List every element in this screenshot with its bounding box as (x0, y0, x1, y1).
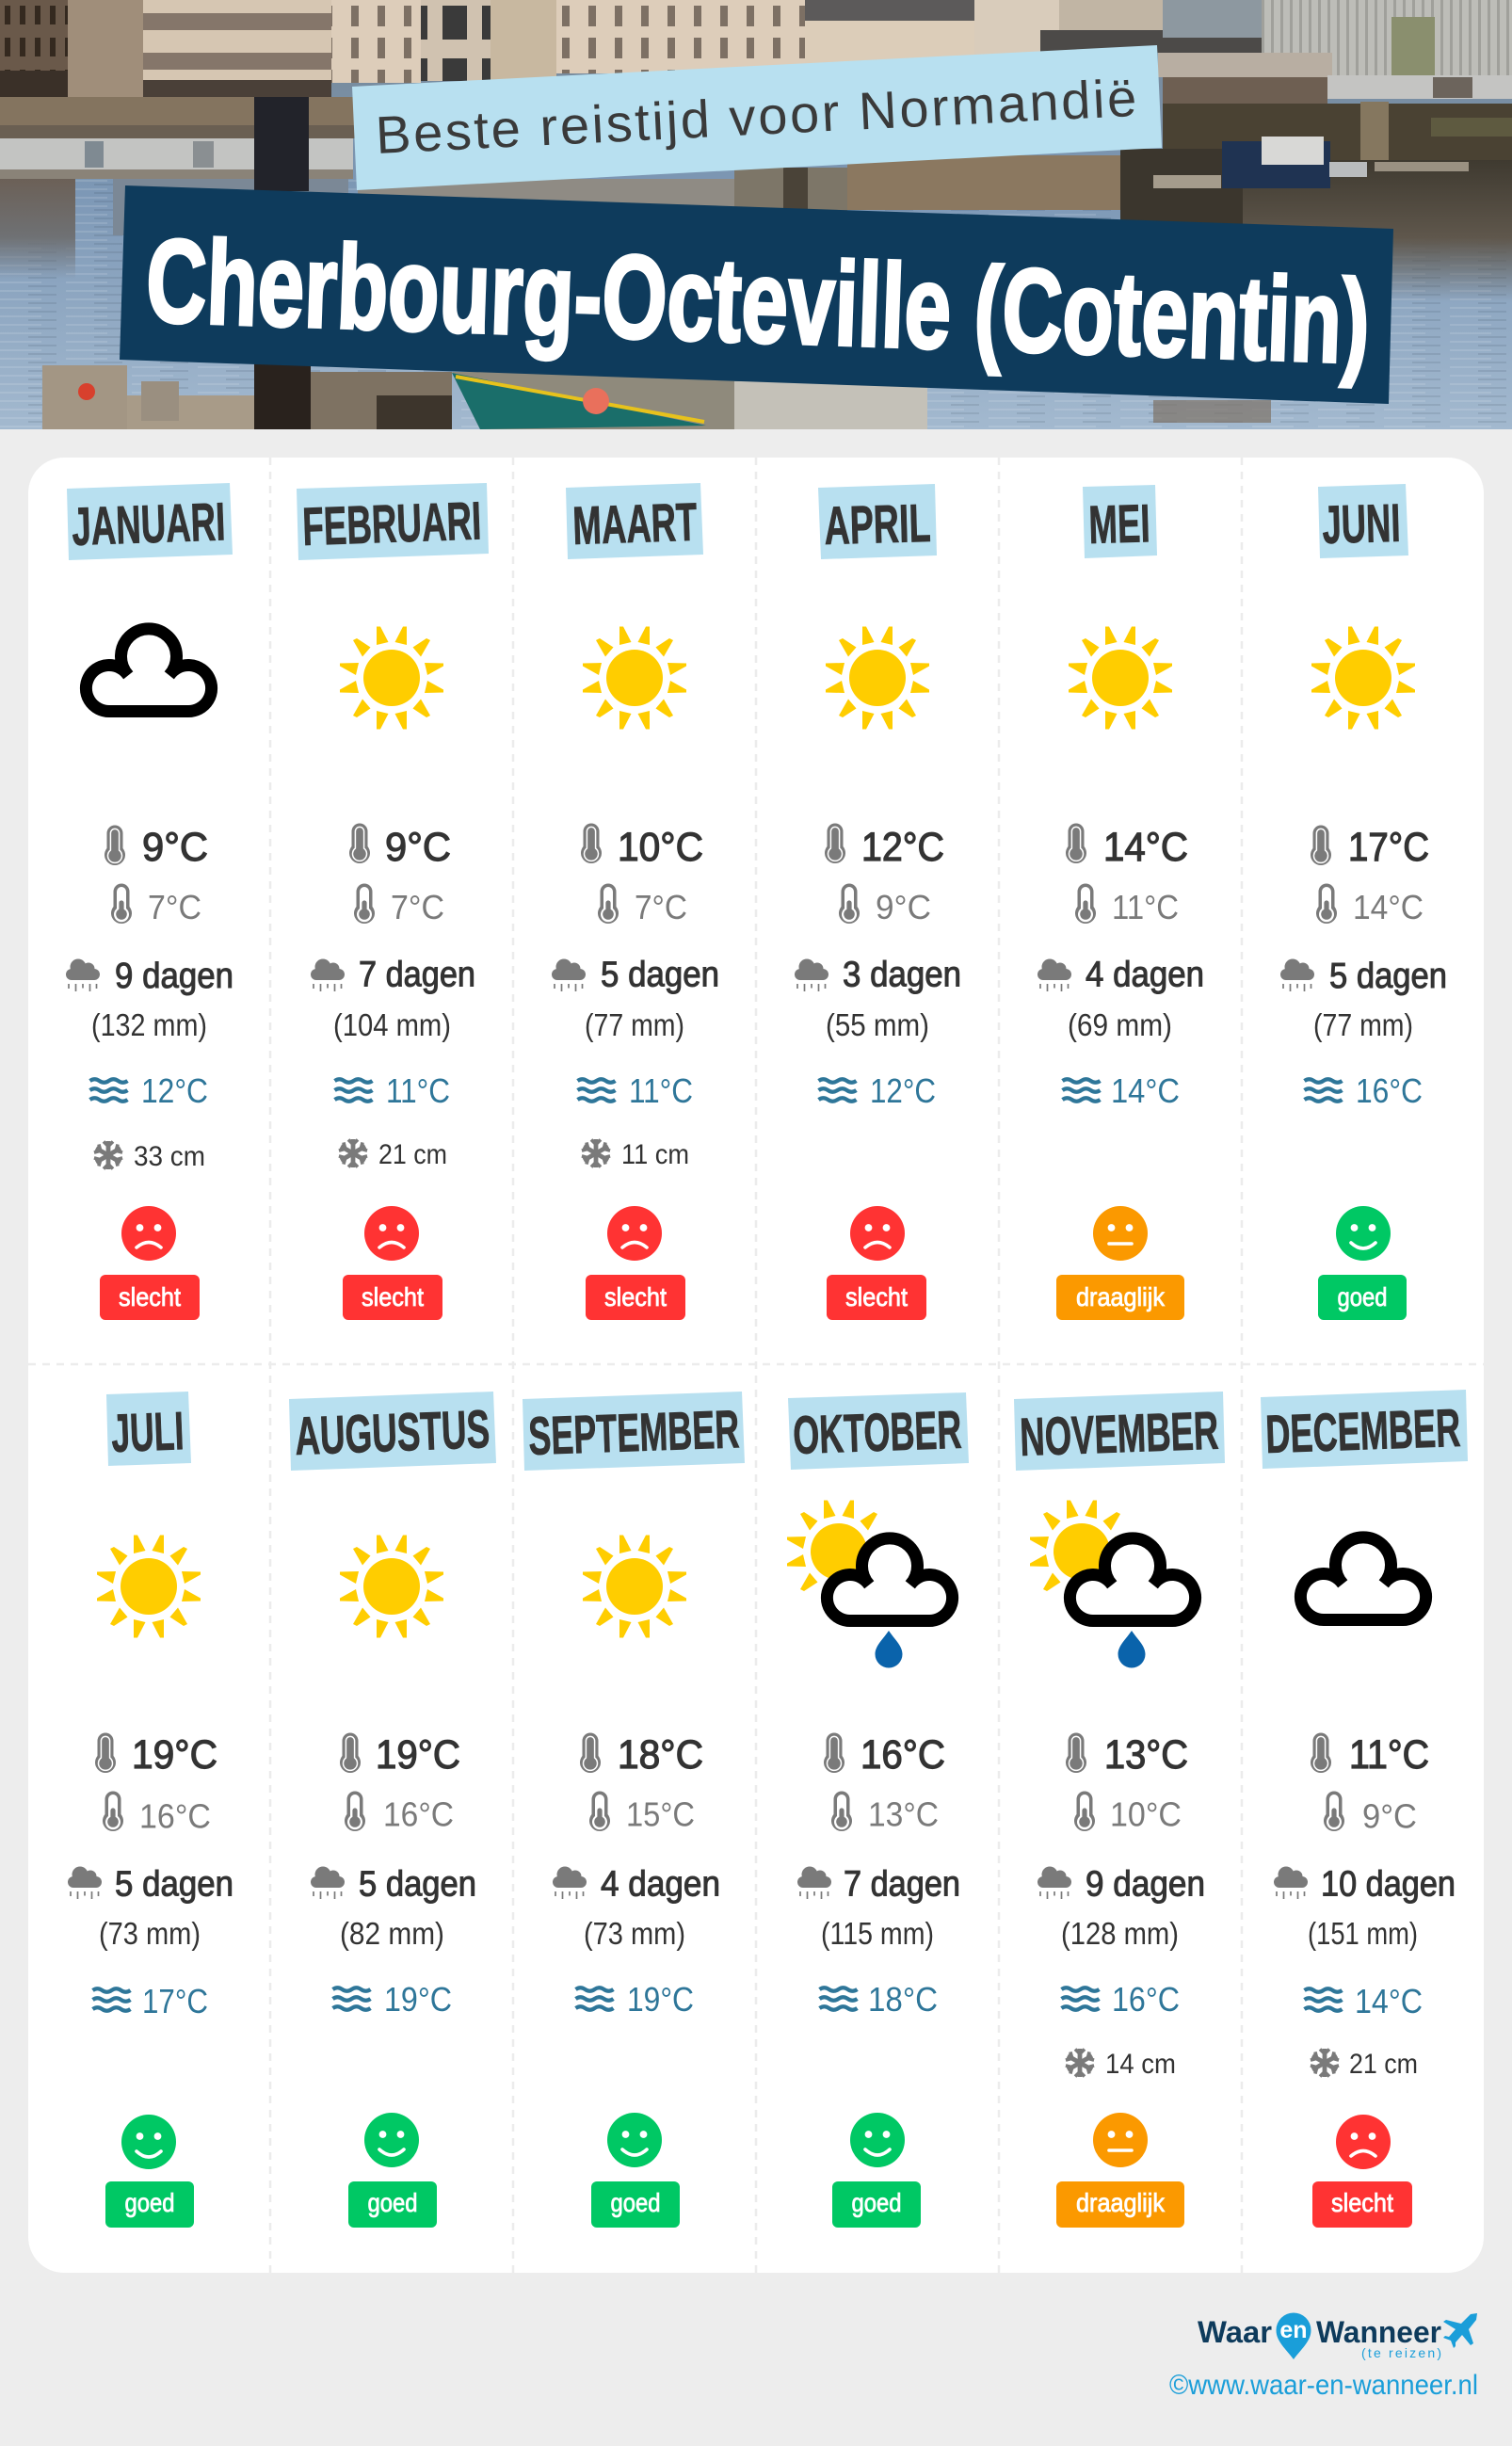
icon: thermometer high (824, 1732, 844, 1773)
heading augustus (289, 1392, 496, 1471)
icon: sun (583, 1535, 686, 1638)
sea temperature: 16°C (1112, 1980, 1180, 2019)
icon: thermometer low (598, 883, 619, 924)
heading februari (297, 483, 489, 560)
low temperature: 7°C (148, 888, 201, 926)
heading maart: MAART (571, 492, 698, 556)
heading juni: JUNI (1322, 493, 1401, 555)
icon: rain (1037, 1866, 1071, 1899)
icon: sun (1069, 627, 1172, 729)
rain days: 5 dagen (601, 955, 719, 994)
icon: thermometer low (1074, 1791, 1095, 1831)
smiley (850, 2113, 905, 2167)
rainfall: (132 mm) (91, 1007, 207, 1042)
badge: goed (1337, 1282, 1388, 1312)
badge (1312, 2181, 1412, 2228)
heading november (1014, 1392, 1225, 1471)
sea temperature: 12°C (141, 1071, 208, 1110)
heading juli (106, 1392, 191, 1466)
sea temperature: 17°C (142, 1982, 208, 2020)
smiley (1336, 2115, 1391, 2169)
subtitle band (352, 45, 1162, 190)
heading juli: JULI (110, 1401, 185, 1464)
heading mei: MEI (1088, 493, 1150, 555)
panel: juli (68, 1392, 233, 2228)
icon: thermometer high (349, 823, 370, 863)
website credit: ©www.waar-en-wanneer.nl (1169, 2370, 1478, 2401)
heading juni (1318, 484, 1408, 558)
icon: sea (333, 1987, 371, 2010)
badge: goed (367, 2188, 418, 2217)
smiley (121, 1206, 176, 1261)
icon: sun (1311, 627, 1415, 729)
icon: sun, cloud and rain drop (1030, 1501, 1196, 1668)
icon: thermometer low (345, 1791, 365, 1831)
icon: sea (335, 1079, 373, 1102)
main card (28, 458, 1484, 2273)
rain days: 9 dagen (115, 957, 233, 996)
icon: thermometer low (103, 1791, 123, 1831)
icon: thermometer low (589, 1791, 610, 1831)
heading april: APRIL (824, 493, 931, 556)
badge (832, 2181, 921, 2228)
low temperature: 7°C (635, 888, 687, 926)
sea temperature: 11°C (629, 1071, 693, 1110)
panel: december (1261, 1390, 1468, 2228)
smiley (1093, 1206, 1148, 1261)
rainfall: (73 mm) (99, 1916, 201, 1951)
icon: sun (97, 1535, 201, 1638)
icon: thermometer high (581, 823, 602, 863)
icon: thermometer low (1324, 1791, 1344, 1831)
icon: snow (1311, 2049, 1339, 2077)
icon: thermometer high (1066, 823, 1086, 863)
subtitle text: Beste reistijd voor Normandië (374, 68, 1138, 165)
logo: Waar en Wanneer (1198, 2312, 1477, 2360)
icon: snow (339, 1139, 367, 1167)
sea temperature: 14°C (1111, 1071, 1180, 1110)
high temperature: 13°C (1104, 1732, 1188, 1778)
snow depth: 11 cm (621, 1139, 689, 1170)
panel: januari (66, 483, 233, 1320)
low temperature: 11°C (1112, 888, 1179, 926)
icon: thermometer low (1316, 883, 1337, 924)
title band (120, 185, 1393, 404)
icon: snow (582, 1139, 610, 1167)
icon: rain (552, 958, 586, 991)
badge (1318, 1275, 1407, 1320)
icon: thermometer high (95, 1732, 116, 1773)
low temperature: 16°C (139, 1796, 211, 1836)
heading februari: FEBRUARI (301, 491, 482, 557)
icon: sun (340, 627, 443, 729)
icon: thermometer high (105, 825, 125, 865)
badge: goed (610, 2188, 661, 2217)
icon: thermometer high (1066, 1732, 1086, 1773)
panel: november (1014, 1392, 1225, 2228)
icon: map pin (1277, 2312, 1311, 2359)
snow depth: 33 cm (134, 1141, 205, 1172)
heading april (818, 484, 937, 559)
rainfall: (115 mm) (821, 1916, 934, 1951)
rainfall: (82 mm) (340, 1916, 444, 1951)
icon: sun (826, 627, 929, 729)
heading september (523, 1392, 745, 1471)
icon: rain (1037, 958, 1071, 991)
rain days: 7 dagen (844, 1864, 960, 1904)
icon: rain (311, 1866, 345, 1899)
icon: rain (1280, 958, 1314, 991)
icon: cloud (1300, 1537, 1426, 1620)
low temperature: 14°C (1353, 888, 1424, 926)
badge (348, 2181, 437, 2228)
low temperature: 7°C (391, 888, 444, 926)
icon: thermometer low (831, 1791, 852, 1831)
icon: map pin: en (1279, 2317, 1308, 2343)
heading maart (566, 483, 703, 559)
badge: slecht (604, 1282, 667, 1312)
badge: slecht (362, 1282, 424, 1312)
icon: sea (578, 1079, 616, 1102)
smiley (364, 1206, 419, 1261)
heading januari: JANUARI (71, 491, 226, 557)
badge (591, 2181, 680, 2228)
header photo: harbour of Cherbourg (0, 0, 1512, 429)
rainfall: (55 mm) (826, 1007, 929, 1042)
panel: oktober (787, 1392, 969, 2228)
icon: sea (576, 1987, 614, 2010)
icon: rain (68, 1866, 102, 1899)
icon: sea (819, 1987, 857, 2010)
sea temperature: 14°C (1355, 1982, 1423, 2020)
panel: maart (552, 483, 719, 1320)
badge (105, 2181, 194, 2228)
badge (586, 1275, 685, 1320)
badge (1056, 2181, 1184, 2228)
low temperature: 9°C (1362, 1796, 1417, 1836)
icon: airplane (1443, 2313, 1477, 2348)
smiley (1093, 2113, 1148, 2167)
rain days: 5 dagen (1329, 957, 1447, 996)
heading mei (1083, 485, 1157, 558)
panel: april (795, 484, 961, 1320)
icon: sea (819, 1079, 857, 1102)
panel: augustus (289, 1392, 496, 2228)
panel: juni (1280, 484, 1447, 1320)
rain days: 7 dagen (359, 955, 475, 994)
smiley (121, 2115, 176, 2169)
rain days: 9 dagen (1086, 1864, 1205, 1904)
icon: rain (795, 958, 828, 991)
smiley (364, 2113, 419, 2167)
icon: rain (66, 958, 100, 991)
high temperature: 17°C (1348, 825, 1429, 870)
rainfall: (104 mm) (333, 1007, 451, 1042)
badge: draaglijk (1076, 2188, 1166, 2217)
panel: september (523, 1392, 745, 2228)
heading november: NOVEMBER (1019, 1401, 1219, 1468)
badge (1056, 1275, 1184, 1320)
icon: thermometer low (111, 883, 132, 924)
rain days: 4 dagen (1086, 955, 1204, 994)
low temperature: 16°C (383, 1794, 454, 1834)
icon: cloud (86, 629, 212, 712)
icon: sun, cloud and rain drop (787, 1501, 953, 1668)
icon: sea (1305, 1079, 1343, 1102)
icon: sun (583, 627, 686, 729)
heading oktober (788, 1392, 969, 1470)
high temperature: 19°C (132, 1732, 217, 1778)
icon: sea (1305, 1988, 1343, 2011)
logo: Waar en Wanneer: Waar (1198, 2315, 1272, 2349)
badge: goed (851, 2188, 902, 2217)
rainfall: (77 mm) (585, 1007, 684, 1042)
heading oktober: OKTOBER (792, 1400, 962, 1466)
sea temperature: 18°C (868, 1980, 938, 2019)
snow depth: 14 cm (1105, 2049, 1176, 2080)
sea temperature: 11°C (386, 1071, 450, 1110)
badge (100, 1275, 200, 1320)
badge (343, 1275, 442, 1320)
icon: thermometer high (580, 1732, 601, 1773)
panel: februari (297, 483, 489, 1320)
sea temperature: 19°C (384, 1980, 452, 2019)
low temperature: 15°C (626, 1794, 695, 1834)
smiley (850, 1206, 905, 1261)
high temperature: 10°C (618, 825, 703, 870)
badge: slecht (845, 1282, 908, 1312)
icon: thermometer high (825, 823, 845, 863)
panel: mei (1037, 485, 1204, 1320)
icon: thermometer low (1075, 883, 1096, 924)
icon: snow (94, 1141, 122, 1169)
icon: sea (92, 1988, 130, 2011)
rainfall: (151 mm) (1308, 1916, 1418, 1951)
high temperature: 14°C (1103, 825, 1188, 870)
high temperature: 16°C (861, 1732, 945, 1778)
rainfall: (128 mm) (1061, 1916, 1179, 1951)
low temperature: 9°C (876, 888, 931, 926)
rain days: 5 dagen (359, 1864, 476, 1904)
icon: sun (340, 1535, 443, 1638)
icon: thermometer low (839, 883, 860, 924)
rain days: 4 dagen (601, 1864, 720, 1904)
icon: sea (90, 1079, 128, 1102)
high temperature: 9°C (385, 825, 451, 870)
sea temperature: 16°C (1356, 1071, 1423, 1110)
badge: draaglijk (1076, 1282, 1166, 1312)
icon: thermometer low (354, 883, 375, 924)
low temperature: 13°C (868, 1794, 939, 1834)
badge: slecht (1331, 2188, 1393, 2217)
high temperature: 9°C (142, 825, 208, 870)
badge (827, 1275, 926, 1320)
high temperature: 19°C (376, 1732, 460, 1778)
heading augustus: AUGUSTUS (294, 1399, 491, 1467)
rain days: 10 dagen (1321, 1864, 1456, 1904)
smiley (1336, 1206, 1391, 1261)
high temperature: 18°C (618, 1732, 703, 1778)
heading januari (67, 483, 233, 560)
icon: rain (797, 1866, 831, 1899)
rain days: 5 dagen (115, 1864, 233, 1904)
logo: Waar en Wanneer: Wanneer (1316, 2315, 1441, 2349)
sea temperature: 19°C (627, 1980, 694, 2019)
snow depth: 21 cm (378, 1139, 447, 1170)
snow depth: 21 cm (1349, 2049, 1418, 2080)
rainfall: (69 mm) (1068, 1007, 1172, 1042)
heading september: SEPTEMBER (527, 1399, 740, 1467)
icon: thermometer high (1311, 825, 1331, 865)
icon: sea (1062, 1079, 1100, 1102)
logo: Waar en Wanneer: (te reizen) (1361, 2345, 1441, 2360)
rainfall: (77 mm) (1313, 1007, 1413, 1042)
low temperature: 10°C (1110, 1794, 1182, 1834)
smiley (607, 2113, 662, 2167)
icon: sea (1062, 1987, 1100, 2010)
icon: rain (311, 958, 345, 991)
rainfall: (73 mm) (584, 1916, 685, 1951)
sea temperature: 12°C (870, 1071, 936, 1110)
icon: thermometer high (340, 1732, 361, 1773)
badge: slecht (119, 1282, 181, 1312)
high temperature: 11°C (1349, 1732, 1429, 1778)
icon: rain (553, 1866, 587, 1899)
rain days: 3 dagen (843, 955, 961, 994)
icon: snow (1066, 2049, 1094, 2077)
badge: goed (124, 2188, 175, 2217)
smiley (607, 1206, 662, 1261)
icon: rain (1274, 1866, 1308, 1899)
high temperature: 12°C (861, 825, 944, 870)
icon: thermometer high (1311, 1732, 1331, 1773)
